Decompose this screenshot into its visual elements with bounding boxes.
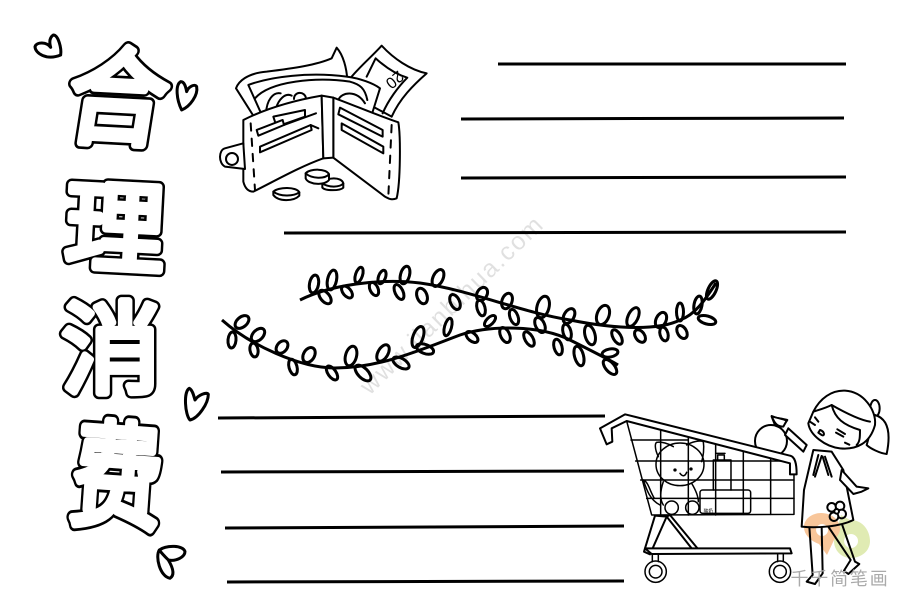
girl arms (785, 428, 868, 494)
title character 合: 合 (59, 38, 177, 161)
goods in cart (700, 453, 751, 514)
dress flower (827, 502, 846, 521)
brand text: 千千简笔画 (790, 569, 890, 589)
logo green ring (834, 515, 870, 558)
girl hair and face (810, 405, 870, 445)
title character 合: 合 (59, 38, 177, 161)
decorative vine upper (300, 265, 720, 346)
logo orange teardrop (804, 513, 840, 555)
illustration: girl pushing cart (772, 391, 889, 584)
girl ponytail (867, 400, 889, 454)
writing lines bottom (218, 416, 624, 582)
girl legs (807, 523, 859, 584)
title: 合理消费 (59, 38, 177, 547)
title character 消: 消 (61, 295, 161, 407)
banknote front (248, 75, 380, 118)
girl head (808, 391, 875, 449)
illustration: shopping cart with cat (600, 414, 797, 582)
goods in cart: 酸奶 (704, 507, 713, 514)
icon: heart bottom (158, 546, 185, 578)
wallet right panel (333, 98, 400, 199)
banknote left (236, 48, 350, 118)
banknote right (352, 46, 427, 117)
banknote right: 20 (382, 67, 406, 92)
cat (643, 441, 704, 514)
girl dress (802, 450, 853, 527)
icon: heart top left (35, 35, 61, 57)
cart wheels (645, 561, 791, 582)
coins (273, 170, 343, 200)
watermark url: www.jianbihua.com (354, 210, 550, 401)
title character 费: 费 (66, 412, 167, 547)
cart handle (600, 414, 797, 474)
title character 理: 理 (62, 172, 168, 289)
decorative vine lower (222, 313, 619, 384)
title character 费: 费 (66, 412, 167, 547)
wallet left panel (243, 96, 323, 192)
wallet spine (322, 96, 333, 158)
icon: heart beside title (177, 82, 197, 110)
writing lines top (284, 64, 846, 233)
cart frame (644, 515, 792, 562)
wallet card slots (257, 108, 383, 153)
bag held by girl (772, 416, 787, 427)
bag in cart (755, 417, 787, 457)
title character 理: 理 (62, 172, 168, 289)
logo: coloured letter marks (804, 513, 870, 558)
icon: heart middle (185, 388, 208, 420)
icon: wallet with banknotes and coins (220, 46, 427, 200)
wallet stitching (251, 123, 392, 197)
wallet strap (220, 143, 245, 169)
title character 消: 消 (61, 295, 161, 407)
collar bow (813, 455, 832, 477)
basket grid (627, 421, 794, 515)
